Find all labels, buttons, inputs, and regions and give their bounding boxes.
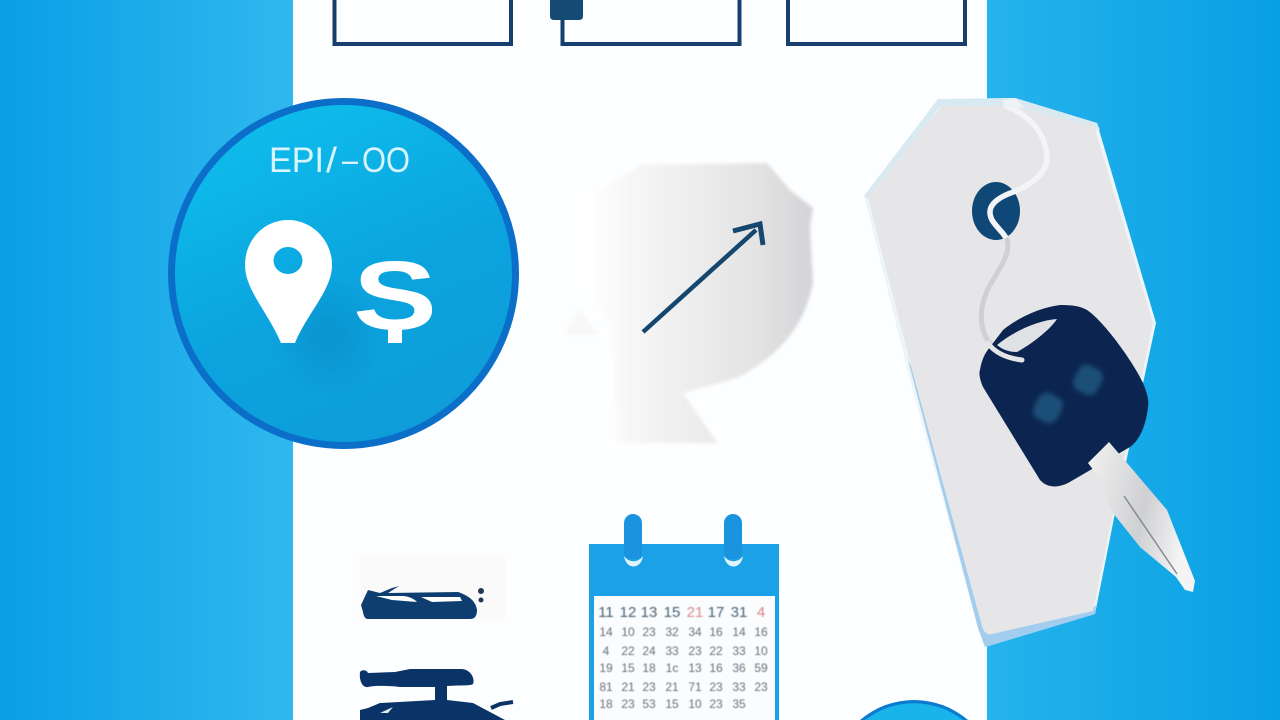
row 3: 4	[603, 644, 610, 658]
tag string lower	[981, 238, 1008, 355]
calendar numbers: 18	[642, 661, 656, 675]
tag top edge highlight	[864, 98, 1100, 200]
right ring	[724, 514, 742, 559]
row 2: 14	[599, 625, 613, 639]
calendar numbers: 36	[732, 661, 746, 675]
calendar numbers: 21	[621, 680, 635, 694]
calendar numbers: 22	[709, 644, 723, 658]
vehicle 2	[360, 669, 505, 720]
tag string upper	[990, 106, 1047, 238]
calendar numbers: 59	[754, 661, 768, 675]
calendar numbers: 1c	[666, 661, 678, 675]
calendar numbers: 23	[709, 697, 723, 711]
tag eyelet	[972, 182, 1020, 240]
frame 2	[562, 0, 740, 44]
row 4: 19	[599, 661, 613, 675]
tag outer edge	[864, 98, 1156, 647]
top frames	[334, 0, 965, 44]
row 5: 81	[599, 680, 613, 694]
vehicle list	[360, 556, 513, 720]
calendar numbers: 23	[688, 644, 702, 658]
calendar numbers: 10	[621, 625, 635, 639]
calendar numbers: 14	[732, 625, 746, 639]
key blade	[1088, 442, 1195, 592]
calendar numbers: 23	[621, 697, 635, 711]
string knot	[1002, 98, 1024, 108]
calendar numbers: 16	[709, 625, 723, 639]
calendar numbers: 23	[642, 680, 656, 694]
calendar rings	[624, 514, 742, 559]
tag blue edge	[908, 360, 1096, 647]
weekday row: 12	[620, 604, 636, 621]
calendar numbers: 24	[642, 644, 656, 658]
badge heading	[269, 141, 410, 180]
pin shadow	[273, 273, 383, 397]
vehicle 1 windows	[376, 596, 462, 602]
frame 1	[334, 0, 511, 44]
right slot	[724, 556, 743, 566]
calendar numbers: 71	[688, 680, 702, 694]
calendar numbers: 33	[665, 644, 679, 658]
badge heading: OO	[362, 141, 410, 180]
vehicle 1 dots	[478, 588, 484, 602]
calendar numbers: 10	[754, 644, 768, 658]
calendar page	[594, 596, 775, 720]
vehicle 2 antenna	[491, 702, 513, 708]
left slot	[624, 556, 643, 566]
growth arrow	[643, 224, 763, 332]
vehicle 1	[361, 586, 477, 619]
calendar numbers: 53	[642, 697, 656, 711]
icon: dollar sign: S	[353, 241, 437, 350]
calendar numbers: 21	[665, 680, 679, 694]
calendar numbers: 16	[754, 625, 768, 639]
calendar numbers: 15	[621, 661, 635, 675]
calendar numbers: 22	[621, 644, 635, 658]
key buttons	[1030, 362, 1106, 426]
weekday row: 31	[731, 604, 747, 621]
plug connector	[550, 0, 583, 20]
weekday row: 11	[598, 604, 614, 621]
central white panel	[293, 0, 987, 720]
frame 3	[788, 0, 965, 44]
badge heading: –	[342, 141, 358, 180]
badge heading: EPI	[269, 141, 324, 180]
silhouette side fade	[565, 308, 600, 335]
background right	[987, 0, 1280, 720]
string end loop	[988, 343, 1022, 360]
weekday row: 4	[757, 604, 765, 621]
left ring	[624, 514, 642, 559]
calendar numbers: 13	[688, 661, 702, 675]
calendar numbers: 34	[688, 625, 702, 639]
vehicle 2 highlight	[380, 707, 393, 713]
weekday row: 17	[708, 604, 724, 621]
weekday row: 15	[664, 604, 680, 621]
badge rim	[860, 700, 968, 720]
silhouette head	[585, 163, 813, 443]
key fob slot	[997, 319, 1057, 352]
calendar numbers: 23	[709, 680, 723, 694]
button 2	[1070, 362, 1106, 398]
calendar body	[589, 544, 779, 720]
row 6: 18	[599, 697, 613, 711]
button 1	[1030, 390, 1066, 426]
calendar numbers: 32	[665, 625, 679, 639]
calendar numbers: 16	[709, 661, 723, 675]
vehicle 1 backdrop	[360, 556, 506, 620]
calendar numbers: 23	[642, 625, 656, 639]
tag body	[868, 106, 1153, 634]
calendar numbers	[598, 604, 768, 711]
silhouette with growth arrow	[565, 163, 813, 443]
calendar numbers: 23	[754, 680, 768, 694]
badge disc	[172, 102, 516, 446]
calendar numbers: 10	[688, 697, 702, 711]
icon: map pin	[245, 220, 332, 343]
background left	[0, 0, 293, 720]
calendar numbers: 33	[732, 644, 746, 658]
key fob	[979, 305, 1148, 486]
bottom badge	[860, 700, 968, 720]
weekday row	[598, 604, 765, 621]
key blade groove	[1124, 496, 1177, 574]
calendar	[589, 514, 779, 720]
price tag with key	[864, 98, 1195, 647]
calendar numbers: 35	[732, 697, 746, 711]
weekday row: 21	[687, 604, 703, 621]
badge fill	[865, 703, 963, 720]
weekday row: 13	[641, 604, 657, 621]
calendar numbers: 15	[665, 697, 679, 711]
calendar ring slots	[624, 556, 743, 566]
calendar numbers: 33	[732, 680, 746, 694]
badge heading: /	[326, 141, 337, 180]
location price badge	[172, 102, 516, 446]
